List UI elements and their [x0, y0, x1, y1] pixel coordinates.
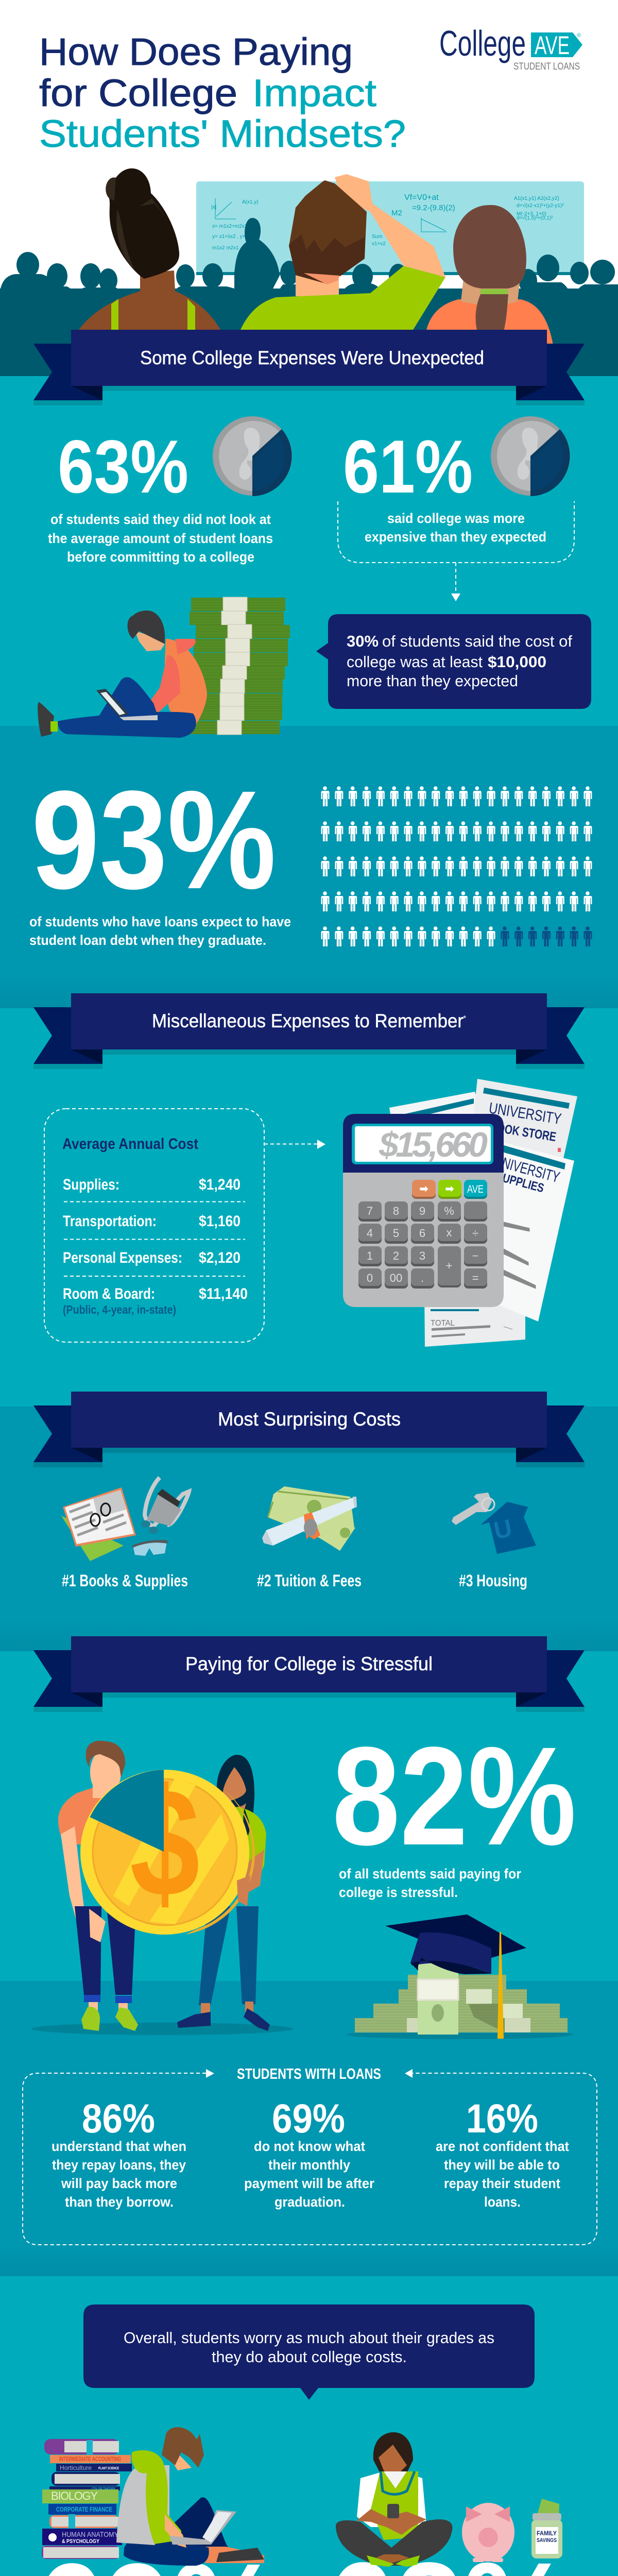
illustration: student with phone, piggy bank and jar: SAVINGS: [537, 2537, 557, 2544]
callout: 30 percent: 30%: [347, 632, 379, 650]
illustration: stack of textbooks: BIOLOGY: [51, 2489, 98, 2502]
icon: coin 63 percent: [213, 416, 292, 496]
stat: 69%: graduation.: [274, 2194, 345, 2210]
illustration: student leaning on money stack: [38, 597, 290, 738]
illustration: classroom blackboard: |x|: [211, 205, 216, 210]
stat: 63%: [48, 416, 292, 565]
banner: Miscellaneous Expenses to Remember: [33, 993, 585, 1069]
callout: 30 percent: college was at least: [347, 653, 483, 671]
illustration: receipts: UNIVERSITY: [492, 1153, 561, 1186]
callout: worry about grades: they do about college costs.: [212, 2348, 407, 2366]
stat: 69%: [244, 2095, 374, 2210]
illustration: calculator: x: [446, 1226, 452, 1239]
icon: coin 61 percent: [491, 416, 570, 496]
panel: average annual cost: $1,240: [199, 1176, 241, 1193]
callout: worry about grades: [83, 2304, 535, 2400]
banner: Miscellaneous Expenses to Remember: Miscellaneous Expenses to Remember: [152, 1010, 464, 1031]
stat: 61%: said college was more: [387, 511, 525, 526]
panel: average annual cost: (Public, 4-year, in-state): [63, 1303, 176, 1316]
stat: 61%: expensive than they expected: [365, 529, 546, 545]
icon: books and supplies: [61, 1478, 189, 1561]
illustration: receipts: TOTAL: [431, 1319, 455, 1328]
stat: 63%: 63%: [58, 425, 188, 509]
illustration: stack of textbooks: COLOR THEORY: [92, 2487, 115, 2492]
title: Students' Mindsets?: [39, 112, 406, 155]
logo: College Ave Student Loans: AVE: [535, 31, 570, 60]
stat: 16%: they will be able to: [444, 2157, 560, 2173]
title: Impact: [252, 72, 376, 114]
illustration: calculator: −: [472, 1249, 478, 1262]
banner: Some College Expenses Were Unexpected: [33, 330, 585, 405]
stat: 86%: understand that when: [52, 2139, 186, 2154]
illustration: calculator: 3: [419, 1249, 425, 1262]
label: tuition and fees: #2 Tuition & Fees: [257, 1571, 362, 1590]
panel: average annual cost: Average Annual Cost: [62, 1136, 198, 1153]
illustration: classroom blackboard: [196, 181, 584, 275]
callout: 30 percent: more than they expected: [347, 672, 518, 690]
illustration: calculator: 7: [367, 1205, 373, 1217]
illustration: student with laptop: [116, 2427, 264, 2566]
banner: Paying for College is Stressful: Paying for College is Stressful: [185, 1653, 433, 1674]
panel: average annual cost: Transportation:: [63, 1213, 157, 1230]
logo: College Ave Student Loans: ®: [577, 32, 581, 39]
illustration: two students holding coin: [31, 1741, 293, 2035]
stat: 16%: are not confident that: [436, 2139, 569, 2154]
title: for College: [39, 72, 237, 114]
stat: 86%: 86%: [82, 2095, 155, 2141]
stat: 16%: repay their student: [444, 2176, 560, 2191]
stat: 63%: of students said they did not look at: [50, 512, 271, 527]
banner: Most Surprising Costs: [33, 1392, 585, 1467]
illustration: classroom blackboard: v1+v2: [372, 241, 386, 247]
illustration: calculator: 2: [393, 1249, 399, 1262]
illustration: calculator: ➡: [420, 1183, 428, 1195]
illustration: calculator: 9: [419, 1205, 425, 1217]
illustration: calculator: [343, 1114, 504, 1307]
chart: coin with 18 percent wedge: [80, 1756, 255, 1942]
illustration: receipts: [389, 1079, 577, 1347]
callout: 30 percent: $10,000: [488, 653, 546, 671]
illustration: calculator: 1: [367, 1249, 373, 1262]
stat: 16%: 16%: [466, 2095, 538, 2141]
stat: 93%: student loan debt when they graduate.: [29, 933, 266, 948]
stat: 16%: [436, 2095, 569, 2210]
illustration: classroom blackboard: Sum: [372, 234, 383, 240]
illustration: stack of textbooks: CORPORATE FINANCE: [56, 2505, 112, 2513]
stat: 86%: [52, 2095, 186, 2210]
illustration: stack of textbooks: [42, 2439, 132, 2559]
illustration: calculator: +: [446, 1259, 452, 1272]
stat: 63%: before committing to a college: [67, 549, 254, 565]
stat: 61%: [343, 416, 570, 545]
stat: 86%: will pay back more: [61, 2176, 177, 2191]
logo: College Ave Student Loans: College: [439, 23, 526, 63]
panel: average annual cost: $11,140: [199, 1285, 248, 1302]
panel: average annual cost: $1,160: [199, 1213, 241, 1230]
illustration: calculator: $15,660: [379, 1125, 488, 1164]
callout: worry about grades: Overall, students worry as much about their grades as: [124, 2329, 494, 2347]
stat: 16%: loans.: [484, 2194, 521, 2210]
stat: 63%: the average amount of student loans: [48, 531, 273, 546]
chart: coin with 18 percent wedge: $: [130, 1756, 200, 1929]
illustration: student with hair bun: [72, 168, 220, 350]
illustration: stack of textbooks: HUMAN ANATOMY: [62, 2530, 119, 2538]
illustration: crowd silhouettes: [0, 218, 618, 330]
illustration: classroom blackboard: A1(x1,y1) A2(x2,y2): [514, 196, 559, 201]
illustration: calculator: AVE: [467, 1183, 484, 1195]
panel: average annual cost: Room & Board:: [63, 1285, 155, 1302]
illustration: calculator: 00: [390, 1272, 402, 1284]
illustration: student with phone, piggy bank and jar: FAMILY: [537, 2530, 557, 2537]
illustration: classroom blackboard: d=√(1,5)²+(0,1)²: [517, 215, 553, 221]
illustration: calculator: %: [444, 1205, 454, 1217]
chart: people pictogram 93 of 100: [320, 786, 597, 947]
stat: 93%: 93%: [31, 761, 276, 918]
banner: Most Surprising Costs: Most Surprising Costs: [218, 1409, 401, 1430]
illustration: calculator: ➡: [445, 1183, 454, 1195]
stat: 69%: payment will be after: [244, 2176, 374, 2191]
illustration: graduation cap on money: [347, 1914, 573, 2039]
stat: 82%: college is stressful.: [339, 1885, 458, 1900]
label: books and supplies: #1 Books & Supplies: [62, 1571, 188, 1590]
illustration: calculator: =: [472, 1272, 478, 1284]
stat: 86%: than they borrow.: [65, 2194, 174, 2210]
illustration: calculator: 0: [367, 1272, 373, 1284]
illustration: calculator: 8: [393, 1205, 399, 1217]
illustration: calculator: 6: [419, 1227, 425, 1240]
illustration: classroom blackboard: x= m1x2+m2x1: [212, 224, 248, 229]
stat: 82%: of all students said paying for: [339, 1866, 521, 1882]
icon: house key: [452, 1493, 536, 1554]
illustration: calculator: 5: [393, 1227, 399, 1240]
illustration: receipts: UNIVERSITY: [488, 1099, 562, 1128]
illustration: student with ponytail: [425, 205, 553, 345]
illustration: stack of textbooks: INTERMEDIATE ACCOUNTING: [59, 2455, 121, 2463]
illustration: calculator: ÷: [472, 1227, 478, 1240]
illustration: calculator: 4: [367, 1227, 373, 1240]
illustration: classroom blackboard: Vf=V0+at: [404, 193, 439, 202]
illustration: stack of textbooks: PLANT SCIENCE: [98, 2467, 119, 2470]
label: housing: #3 Housing: [459, 1571, 527, 1590]
illustration: classroom blackboard: M2: [391, 209, 402, 217]
illustration: classroom blackboard: m1x2 m2x1: [212, 245, 239, 251]
stat: 93%: of students who have loans expect to have: [29, 914, 291, 929]
panel: average annual cost: Personal Expenses:: [63, 1249, 182, 1266]
arrow: dashed bracket to callout: [338, 501, 574, 601]
illustration: classroom blackboard: d=√(x2-x1)²+(y2-y1)²: [517, 202, 564, 209]
icon: tuition money and diploma: [262, 1486, 357, 1551]
panel: students with loans: STUDENTS WITH LOANS: [237, 2066, 381, 2082]
illustration: classroom blackboard: =9.2-(9.8)(2): [412, 204, 455, 212]
title: [39, 30, 406, 155]
illustration: calculator: .: [421, 1272, 424, 1284]
illustration: stack of textbooks: Horticulture: [60, 2464, 92, 2471]
stat: 69%: do not know what: [254, 2139, 365, 2154]
illustration: classroom blackboard: y= x1+λx2 , y+y2: [212, 234, 251, 240]
panel: students with loans: [23, 2066, 597, 2245]
stat: 82%: 82%: [332, 1718, 576, 1874]
illustration: receipts: SUPPLIES: [494, 1170, 545, 1195]
banner: Miscellaneous Expenses to Remember: *: [463, 1014, 466, 1023]
banner: Some College Expenses Were Unexpected: Some College Expenses Were Unexpected: [140, 347, 484, 368]
stat: 61%: 61%: [343, 425, 473, 509]
callout: 30 percent: of students said the cost of: [382, 632, 572, 650]
panel: average annual cost: $2,120: [199, 1249, 241, 1266]
stat: 69%: 69%: [272, 2095, 345, 2141]
banner: Paying for College is Stressful: [33, 1636, 585, 1712]
callout: 30 percent: [316, 614, 591, 709]
stat: 69%: their monthly: [268, 2157, 350, 2173]
panel: average annual cost: Supplies:: [63, 1176, 119, 1193]
illustration: student scratching head: [235, 174, 445, 335]
stat: 86%: they repay loans, they: [52, 2157, 186, 2173]
illustration: student with phone, piggy bank and jar: [336, 2432, 562, 2567]
logo: College Ave Student Loans: STUDENT LOANS: [513, 61, 580, 72]
illustration: receipts: BOOK STORE: [489, 1120, 557, 1144]
title: How Does Paying: [39, 30, 353, 73]
icon: house key: U: [491, 1515, 514, 1545]
panel: average annual cost: [44, 1109, 264, 1342]
illustration: classroom blackboard: A(x1,y): [242, 199, 259, 205]
arrow: cost to calculator: [264, 1140, 325, 1149]
illustration: classroom blackboard: M(-2+3, 1+0): [517, 211, 546, 217]
illustration: stack of textbooks: & PSYCHOLOGY: [62, 2538, 100, 2545]
